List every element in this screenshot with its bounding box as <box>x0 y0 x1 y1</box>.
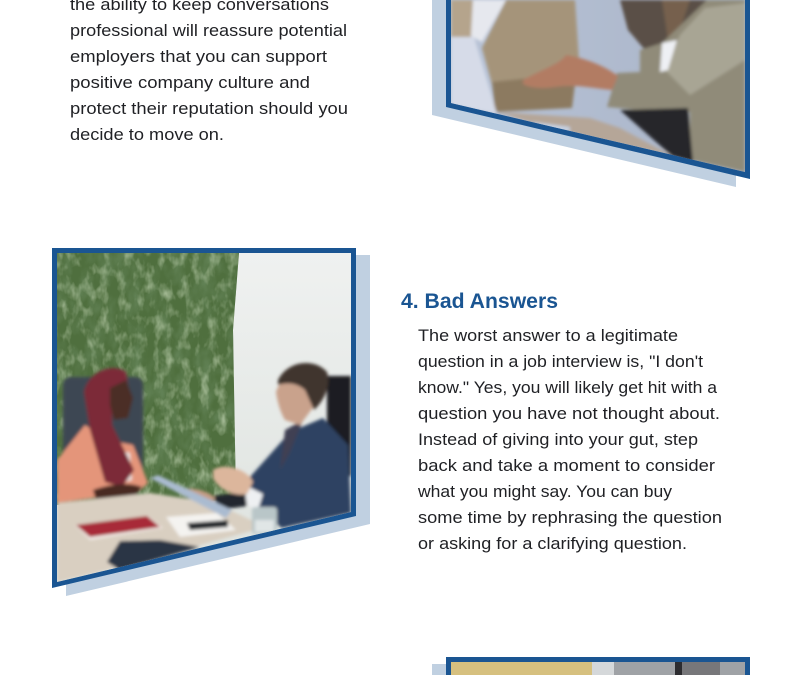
text block: point 3 closing paragraph: employers that you can support <box>70 47 327 66</box>
text block: bad answers paragraph: Instead of giving into your gut, step <box>418 430 698 449</box>
panel: top-right photo frame <box>432 0 750 187</box>
photo: top edge of next photo <box>451 662 745 675</box>
text block: bad answers paragraph: some time by rephrasing the question <box>418 508 722 527</box>
text block: point 3 closing paragraph: decide to move on. <box>70 125 224 144</box>
text block: point 3 closing paragraph: positive company culture and <box>70 73 310 92</box>
panel: middle-left photo frame <box>52 248 370 596</box>
text block: bad answers paragraph: question in a job interview is, "I don't <box>418 352 703 371</box>
text block: bad answers paragraph: or asking for a clarifying question. <box>418 534 687 553</box>
text block: bad answers paragraph: back and take a moment to consider <box>418 456 715 475</box>
photo: two people talking at a table <box>451 0 745 175</box>
photo: job interview across a desk <box>57 253 351 583</box>
text block: bad answers paragraph: The worst answer to a legitimate <box>418 326 678 345</box>
text block: point 3 closing paragraph <box>70 0 348 144</box>
panel: bottom-right photo frame <box>432 657 750 675</box>
text block: point 3 closing paragraph: protect their reputation should you <box>70 99 348 118</box>
text block: bad answers paragraph <box>417 326 722 553</box>
text block: point 3 closing paragraph: professional will reassure potential <box>70 21 347 40</box>
text block: bad answers paragraph: question you have not thought about. <box>418 404 720 423</box>
text block: bad answers paragraph: know." Yes, you will likely get hit with a <box>418 378 718 397</box>
heading: 4. Bad Answers: 4. Bad Answers <box>401 290 558 313</box>
text block: bad answers paragraph: what you might say. You can buy <box>417 482 673 501</box>
